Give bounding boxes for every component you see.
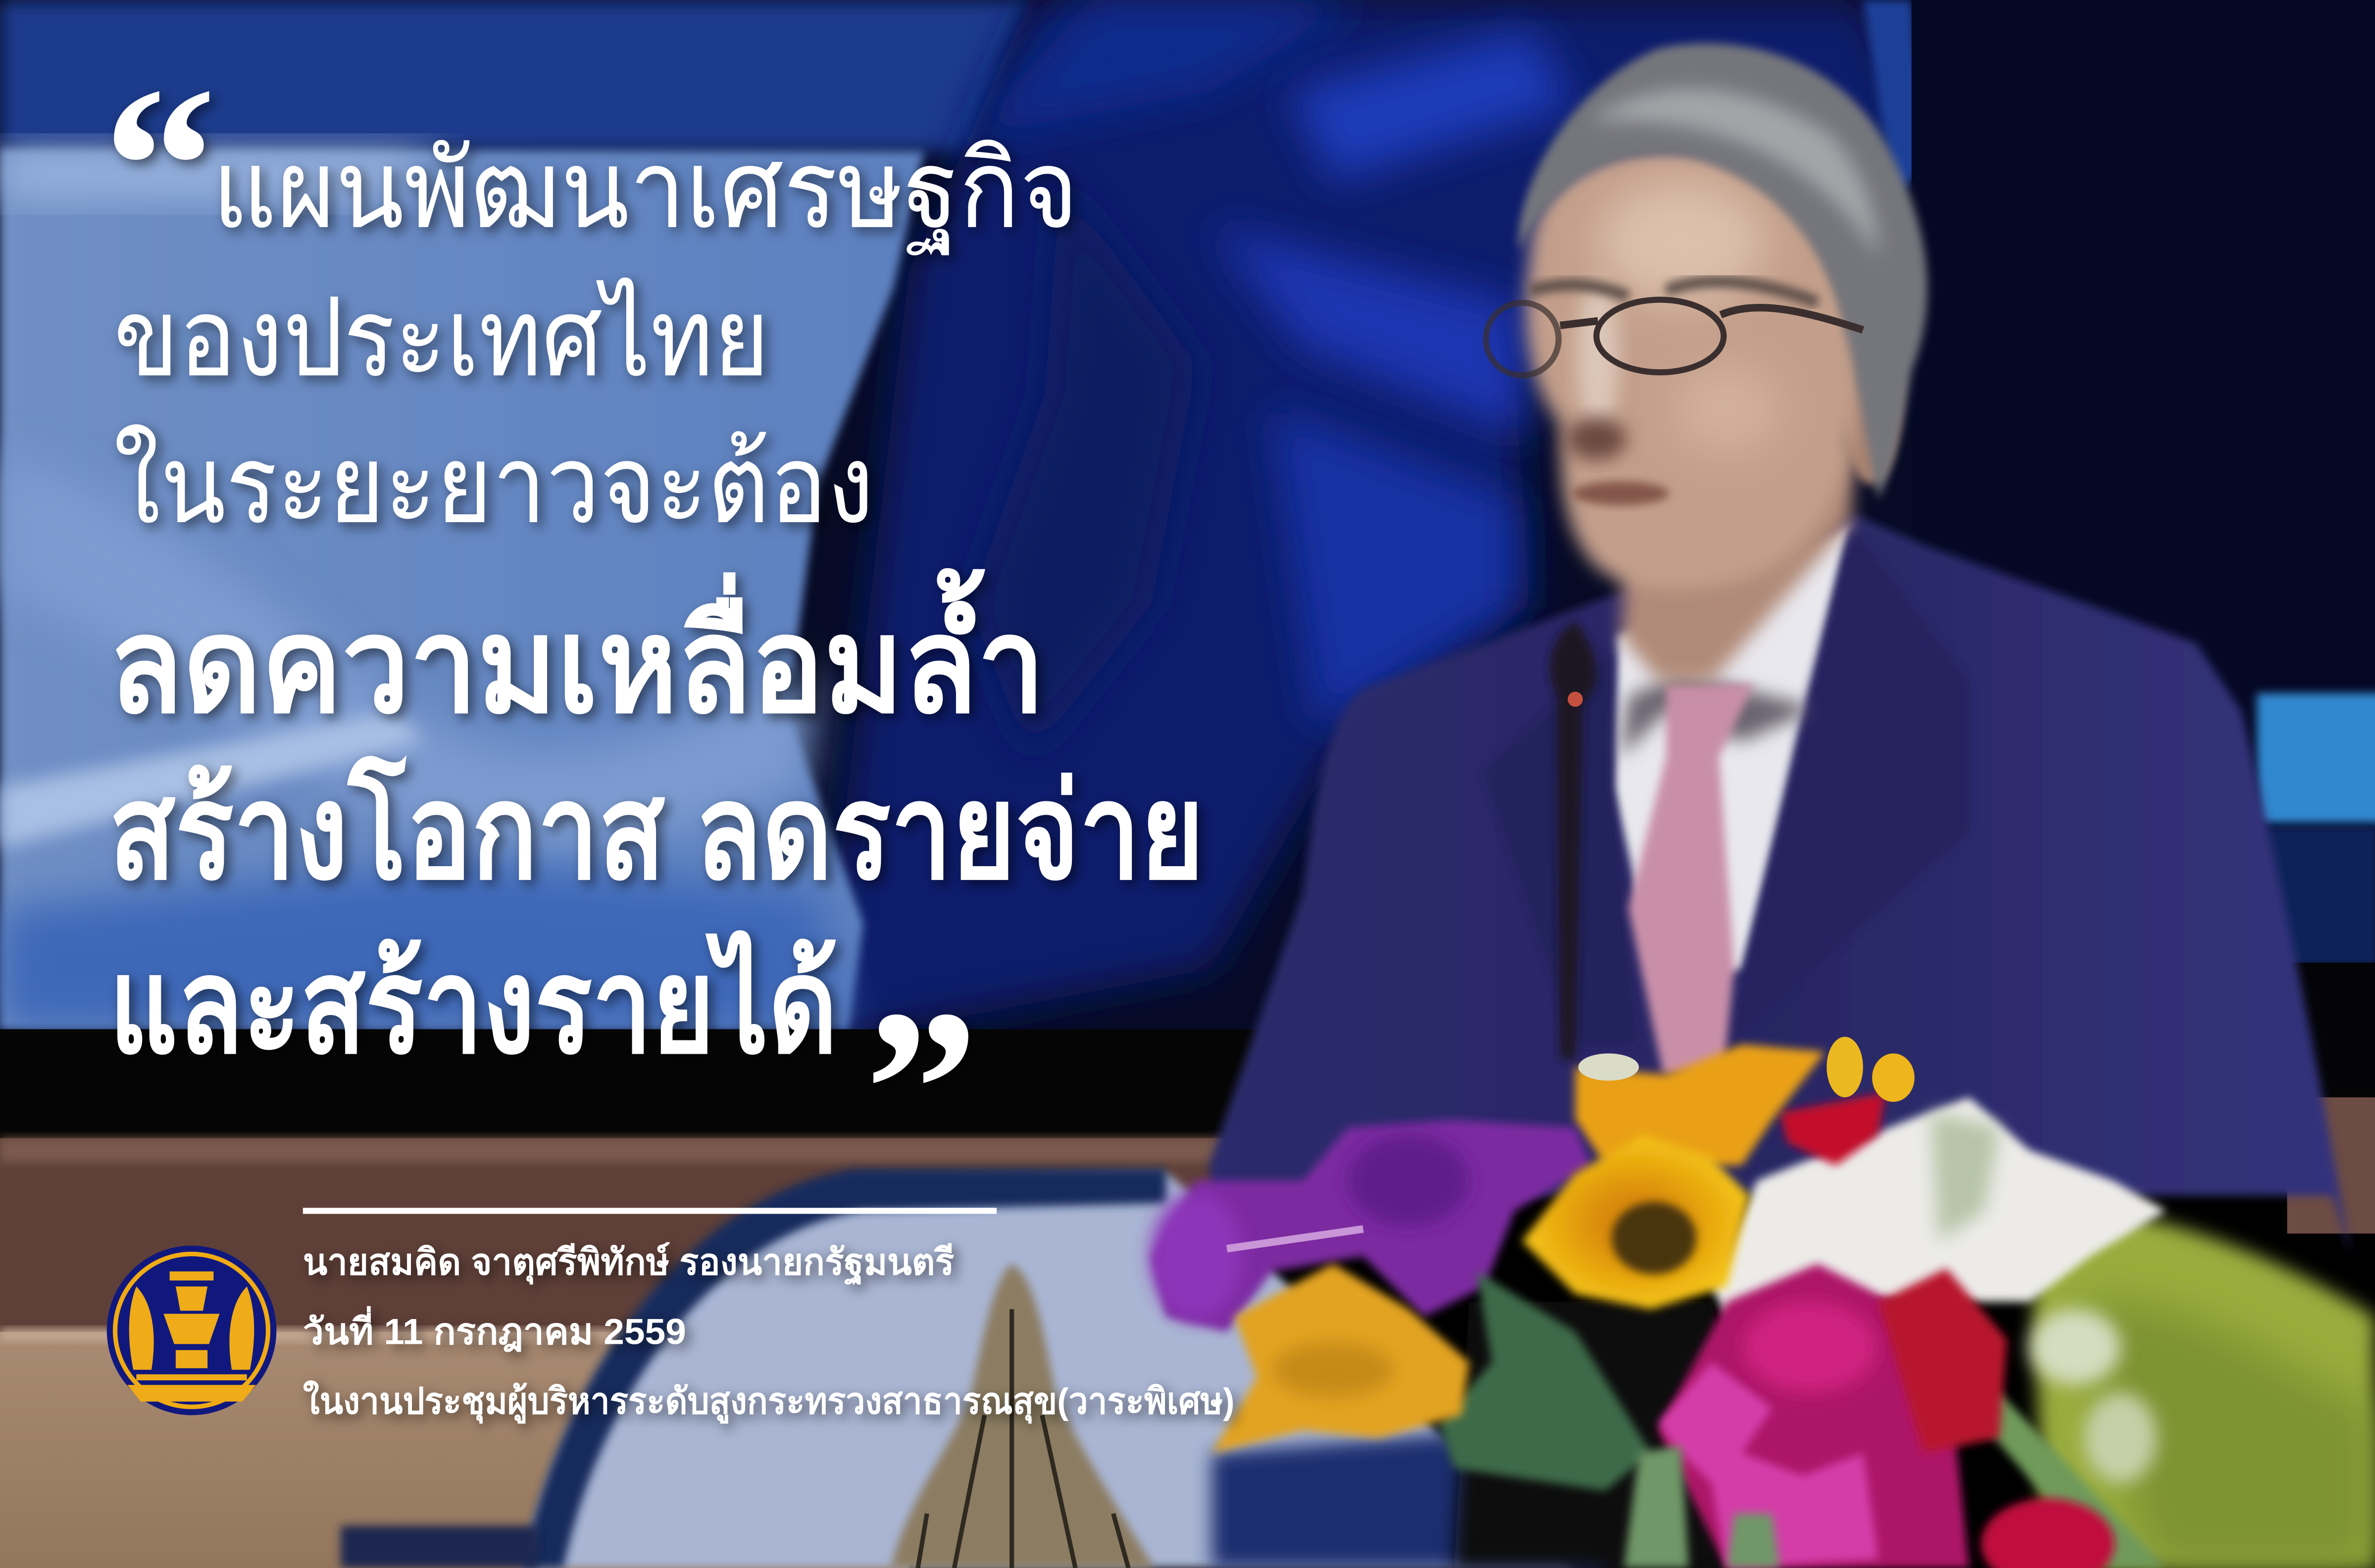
attribution text: [303, 1242, 1234, 1424]
line 4 emphasis: ลดความเหลื่อมล้ำ: [109, 568, 1045, 740]
glasses: [1486, 299, 1863, 375]
red flower bottom: [1981, 1498, 2115, 1568]
closing quote mark: ”: [865, 964, 978, 1215]
date: วันที่ 11 กรกฎาคม 2559: [303, 1306, 686, 1352]
attribution divider: [303, 1208, 997, 1214]
line 3: ในระยะยาวจะต้อง: [113, 424, 874, 545]
fern: [1439, 1272, 1651, 1491]
seal emblem: [127, 1272, 256, 1402]
shirt: [1613, 524, 1851, 984]
line 6 emphasis: และสร้างรายได้: [109, 929, 838, 1080]
background: stage screen: [0, 0, 2375, 1044]
leaf blades: [1624, 1445, 1689, 1568]
neck: [1620, 439, 1856, 681]
suit jacket: [1209, 515, 2351, 1256]
flower arrangement: [1151, 1037, 2375, 1568]
right greenery: [2029, 1209, 2375, 1568]
tie: [1628, 684, 1754, 1075]
yellow orchids top: [1575, 1044, 1825, 1166]
person: speaker: [1209, 44, 2351, 1256]
podium emblem: [341, 1169, 1606, 1568]
face: [1526, 148, 1860, 589]
background: stage floor bands: [0, 963, 2375, 1568]
temple spire: [891, 1264, 1154, 1568]
orange orchids: [1212, 1264, 1469, 1453]
lapels: [1712, 524, 1969, 1060]
red flower top: [1780, 1093, 1886, 1166]
sunflower: [1522, 1135, 1749, 1309]
line 2: ของประเทศไทย: [113, 277, 769, 398]
line 1: แผนพัฒนาเศรษฐกิจ: [212, 129, 1078, 255]
government seal icon: [107, 1246, 276, 1415]
line 5 emphasis: สร้างโอกาส ลดรายจ่าย: [109, 753, 1204, 907]
purple orchids: [1151, 1120, 1590, 1332]
event: ในงานประชุมผู้บริหารระดับสูงกระทรวงสาธารณสุข(วาระพิเศษ): [303, 1380, 1234, 1424]
ear: [1840, 309, 1901, 485]
dark base: [1454, 1302, 1757, 1568]
white orchids: [1712, 1097, 2166, 1317]
microphone: [1550, 621, 1597, 1060]
magenta flowers: [1659, 1264, 1969, 1568]
quote text: [103, 40, 1204, 1215]
hair: [1519, 44, 1927, 499]
speaker name: นายสมคิด จาตุศรีพิทักษ์ รองนายกรัฐมนตรี: [303, 1242, 954, 1285]
opening quote mark: “: [103, 40, 216, 292]
